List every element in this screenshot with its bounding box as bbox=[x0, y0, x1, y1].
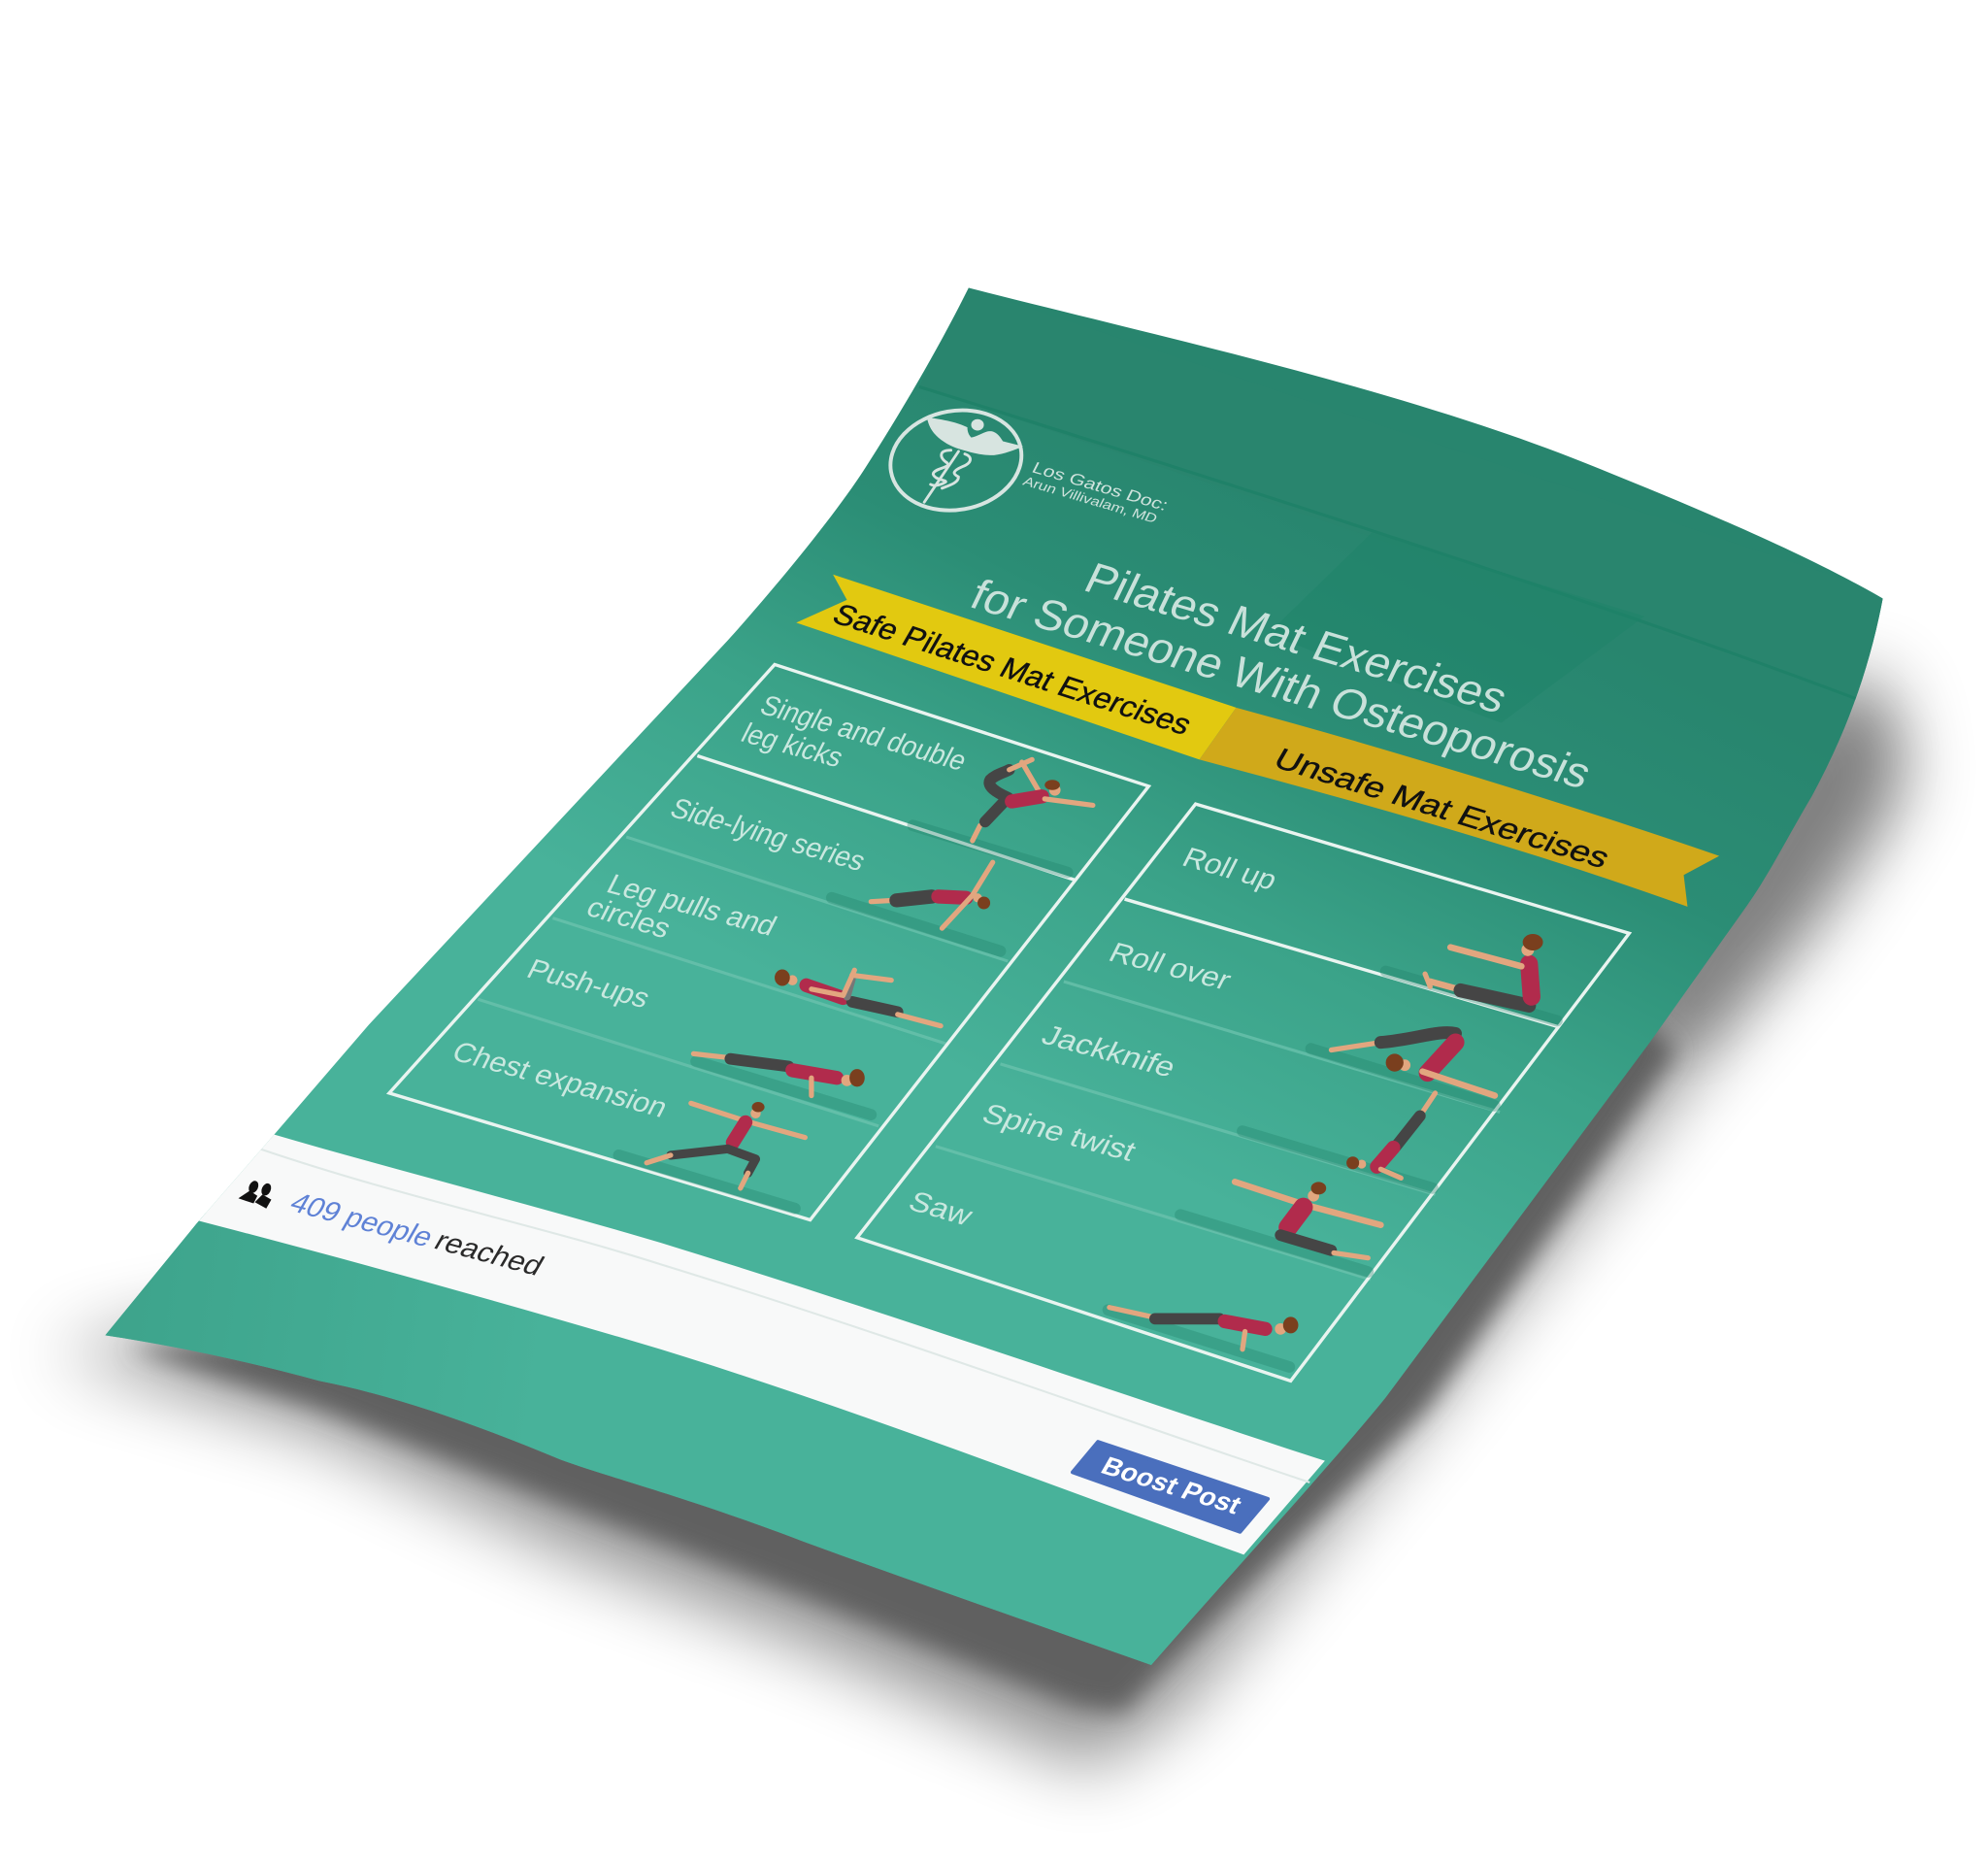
labels: safe: leg kicks bbox=[736, 718, 848, 774]
labels: unsafe: Saw bbox=[904, 1186, 977, 1232]
labels: unsafe: Roll over bbox=[1104, 938, 1236, 996]
labels: unsafe: Roll up bbox=[1177, 843, 1282, 896]
ribbon: safe bbox=[796, 575, 1236, 759]
labels: safe: Chest expansion bbox=[447, 1036, 673, 1123]
icon: wings bbox=[927, 417, 1023, 455]
bottom band bbox=[105, 1213, 1311, 1665]
ribbon: unsafe: Unsafe Mat Exercises bbox=[1269, 743, 1616, 875]
logo text: Arun Villivalam, MD bbox=[1020, 474, 1160, 526]
button: boost post: Boost Post bbox=[1096, 1451, 1247, 1519]
panel: unsafe exercises bbox=[857, 804, 1629, 1381]
figure: warrior bbox=[618, 1102, 805, 1209]
title: Pilates Mat Exercises bbox=[1077, 553, 1515, 722]
labels: unsafe bbox=[904, 843, 1282, 1232]
labels: unsafe: Jackknife bbox=[1037, 1019, 1180, 1083]
reach text: 409 people bbox=[284, 1187, 439, 1253]
figure: dancer bbox=[912, 759, 1093, 873]
button: boost post bbox=[1073, 1442, 1268, 1532]
labels: safe: Side-lying series bbox=[665, 793, 871, 878]
title: for Someone With Osteoporosis bbox=[963, 570, 1599, 798]
figure: spine twist bbox=[1180, 1182, 1380, 1272]
panel: safe exercises bbox=[389, 664, 1148, 1220]
labels: safe: Single and double bbox=[755, 690, 972, 777]
logo text bbox=[1020, 459, 1172, 526]
white post strip bbox=[195, 1134, 1325, 1554]
labels: safe: Leg pulls and bbox=[602, 869, 781, 942]
figure: leg pull bbox=[775, 970, 941, 1026]
ribbon: safe: Safe Pilates Mat Exercises bbox=[827, 598, 1198, 741]
header band bbox=[919, 288, 1902, 700]
figure: roll over bbox=[1311, 1033, 1495, 1106]
labels: safe bbox=[447, 690, 972, 1123]
labels: unsafe: Spine twist bbox=[977, 1098, 1142, 1167]
figure: saw bbox=[1109, 1308, 1298, 1367]
icon: caduceus staff bbox=[924, 450, 971, 502]
labels: safe: Push-ups bbox=[522, 954, 655, 1015]
reach text bbox=[284, 1187, 549, 1282]
reach text: reached bbox=[429, 1226, 549, 1282]
poster sheet bbox=[76, 253, 1927, 1686]
figure: jackknife bbox=[1242, 1093, 1436, 1188]
figure: side plank bbox=[832, 862, 1001, 951]
figure: roll up bbox=[1386, 934, 1557, 1020]
drop shadow bbox=[50, 672, 1908, 1769]
darker header triangle bbox=[1268, 533, 1644, 723]
labels: safe: circles bbox=[581, 892, 676, 945]
logo text: Los Gatos Doc: bbox=[1029, 459, 1172, 515]
ribbon: unsafe bbox=[1200, 708, 1719, 907]
figure: push-up bbox=[693, 1053, 871, 1115]
logo bbox=[882, 400, 1172, 526]
icon: people bbox=[239, 1180, 273, 1209]
